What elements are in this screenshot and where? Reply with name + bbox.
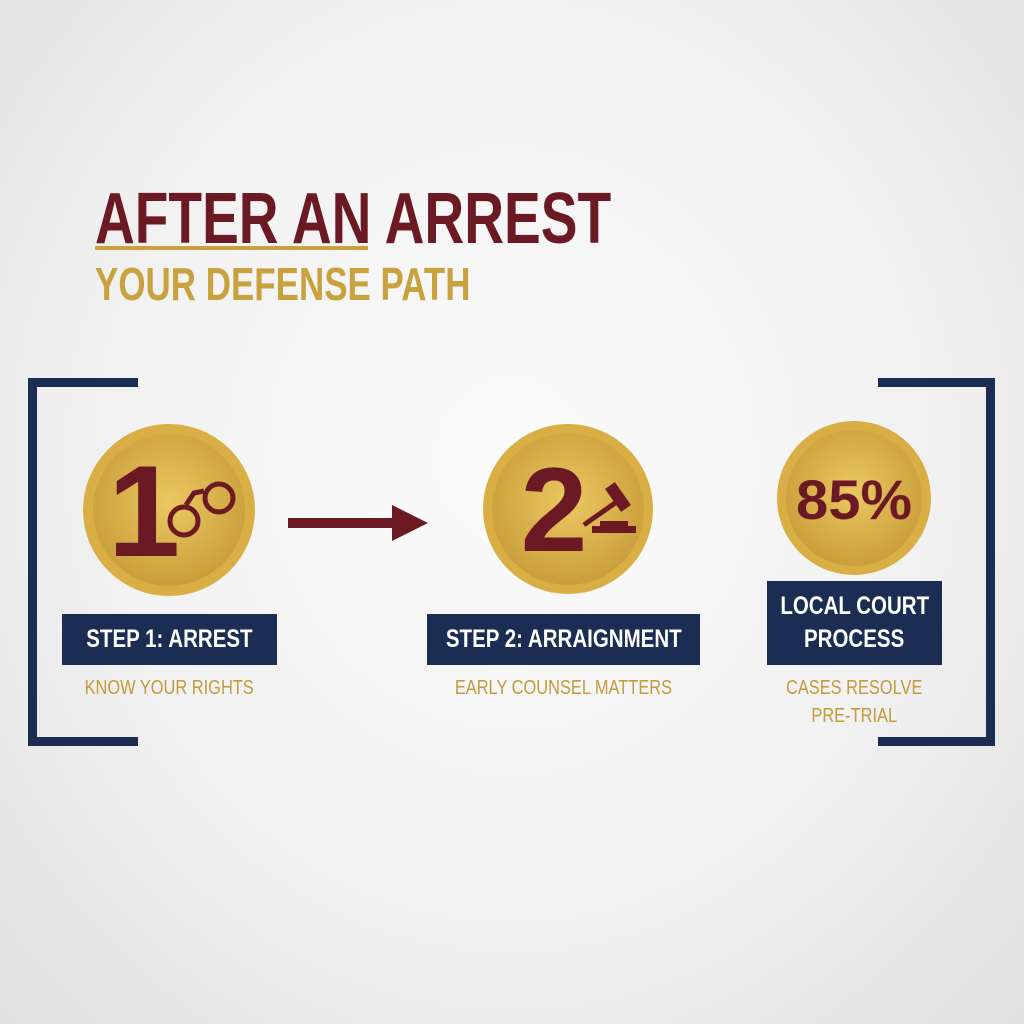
stat text: CASES RESOLVE [786,677,923,699]
badge 1 [83,424,255,596]
left bracket [28,378,138,746]
stat label: LOCAL COURT [780,592,929,620]
step 2 label: STEP 2: ARRAIGNMENT [446,625,681,653]
stat label: PROCESS [804,625,905,653]
badge 3 [777,421,931,575]
subtitle: YOUR DEFENSE PATH [95,258,471,310]
badge 2: 2 [521,443,587,577]
step 1 label: STEP 1: ARREST [86,625,253,653]
right bracket [878,378,995,746]
stat label [767,581,942,665]
step 1 text: KNOW YOUR RIGHTS [85,677,254,699]
step 2 text: EARLY COUNSEL MATTERS [455,677,672,699]
badge 2 [483,424,653,594]
arrow [288,505,428,541]
stat text [786,677,923,727]
badge 3: 85% [796,468,912,531]
badge 1: 1 [108,438,180,584]
step 2 label [427,614,700,665]
title: AFTER AN ARREST [95,179,611,259]
step 1 label [62,614,277,665]
stat text: PRE-TRIAL [812,705,897,727]
